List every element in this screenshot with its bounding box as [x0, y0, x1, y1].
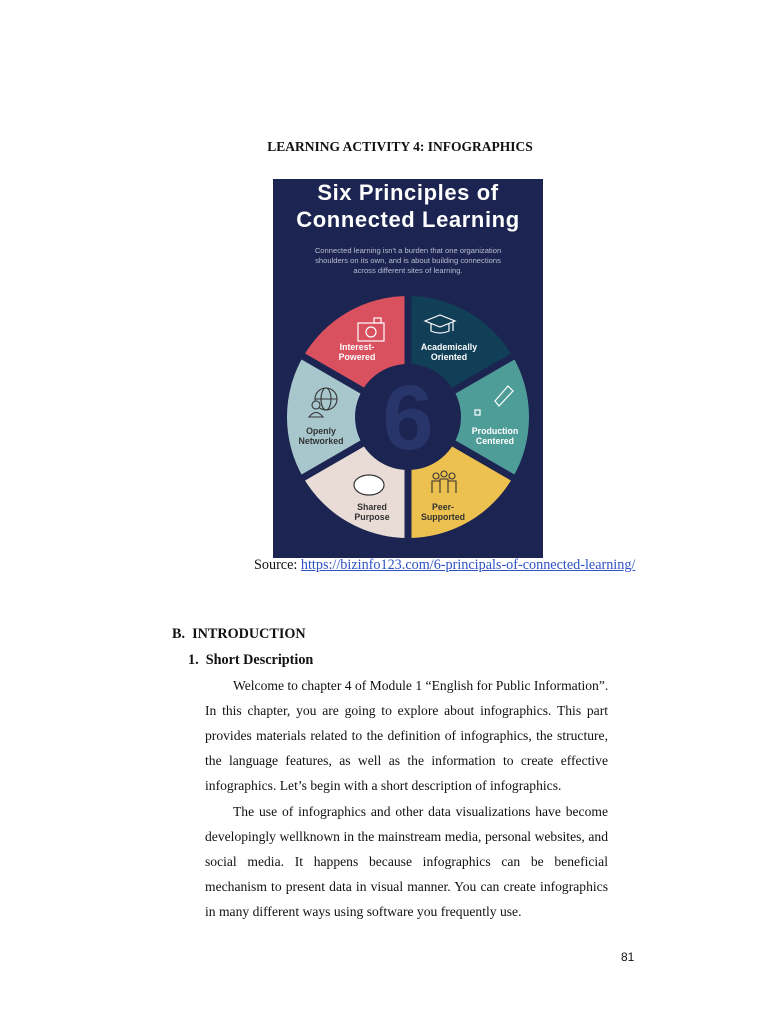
segment labels: Peer- [432, 502, 454, 512]
icon: speech bubble [354, 475, 384, 495]
infographic subtitle [315, 246, 501, 275]
icon: globe person [309, 388, 337, 417]
infographic title: Connected Learning [296, 207, 520, 232]
subheading: 1. Short Description [188, 652, 313, 668]
paragraph 2: The use of infographics and other data visualizations have become [233, 804, 608, 819]
infographic subtitle: across different sites of learning. [353, 266, 463, 275]
infographic subtitle: shoulders on its own, and is about building connections [315, 256, 501, 265]
segment labels: Centered [476, 436, 514, 446]
segment labels: Supported [421, 512, 465, 522]
paragraph 1: provides materials related to the definition of infographics, the structure, [205, 728, 608, 743]
segment labels: Networked [299, 436, 343, 446]
heading: learning activity: LEARNING ACTIVITY 4: INFOGRAPHICS [267, 139, 533, 154]
segment labels: Oriented [431, 352, 467, 362]
infographic subtitle: Connected learning isn't a burden that one organization [315, 246, 501, 255]
infographic title [296, 180, 520, 232]
source line: Source: https://bizinfo123.com/6-principals-of-connected-learning/ [254, 557, 635, 573]
segment labels: Shared [357, 502, 387, 512]
paragraph 1 [205, 678, 608, 793]
page number: 81 [621, 950, 634, 964]
infographic: six principles [273, 179, 543, 558]
infographic title: Six Principles of [317, 180, 499, 205]
segment labels: Academically [421, 342, 477, 352]
segment labels: Openly [306, 426, 336, 436]
section heading: B. INTRODUCTION [172, 626, 306, 642]
icon: pen [475, 386, 513, 415]
paragraph 2 [205, 804, 608, 919]
paragraph 2: developingly wellknown in the mainstream media, personal websites, and [205, 829, 608, 844]
paragraph 1: the language features, as well as the information to create effective [205, 753, 608, 768]
paragraph 2: social media. It happens because infographics can be beneficial [205, 854, 608, 869]
wheel: 6 [382, 367, 434, 469]
paragraph 1: In this chapter, you are going to explore about infographics. This part [205, 703, 608, 718]
segment labels: Powered [339, 352, 375, 362]
segment labels: Interest- [340, 342, 374, 352]
paragraph 1: Welcome to chapter 4 of Module 1 “English for Public Information”. [233, 678, 608, 693]
segment labels: Purpose [354, 512, 390, 522]
icon: people [432, 471, 456, 493]
segment labels: Production [472, 426, 518, 436]
segment labels [299, 342, 518, 522]
paragraph 2: mechanism to present data in visual manner. You can create infographics [205, 879, 608, 894]
paragraph 2: in many different ways using software you frequently use. [205, 904, 521, 919]
wheel [287, 291, 529, 543]
icon: camera [358, 318, 384, 341]
paragraph 1: infographics. Let’s begin with a short description of infographics. [205, 778, 561, 793]
icon: grad cap [425, 315, 455, 333]
